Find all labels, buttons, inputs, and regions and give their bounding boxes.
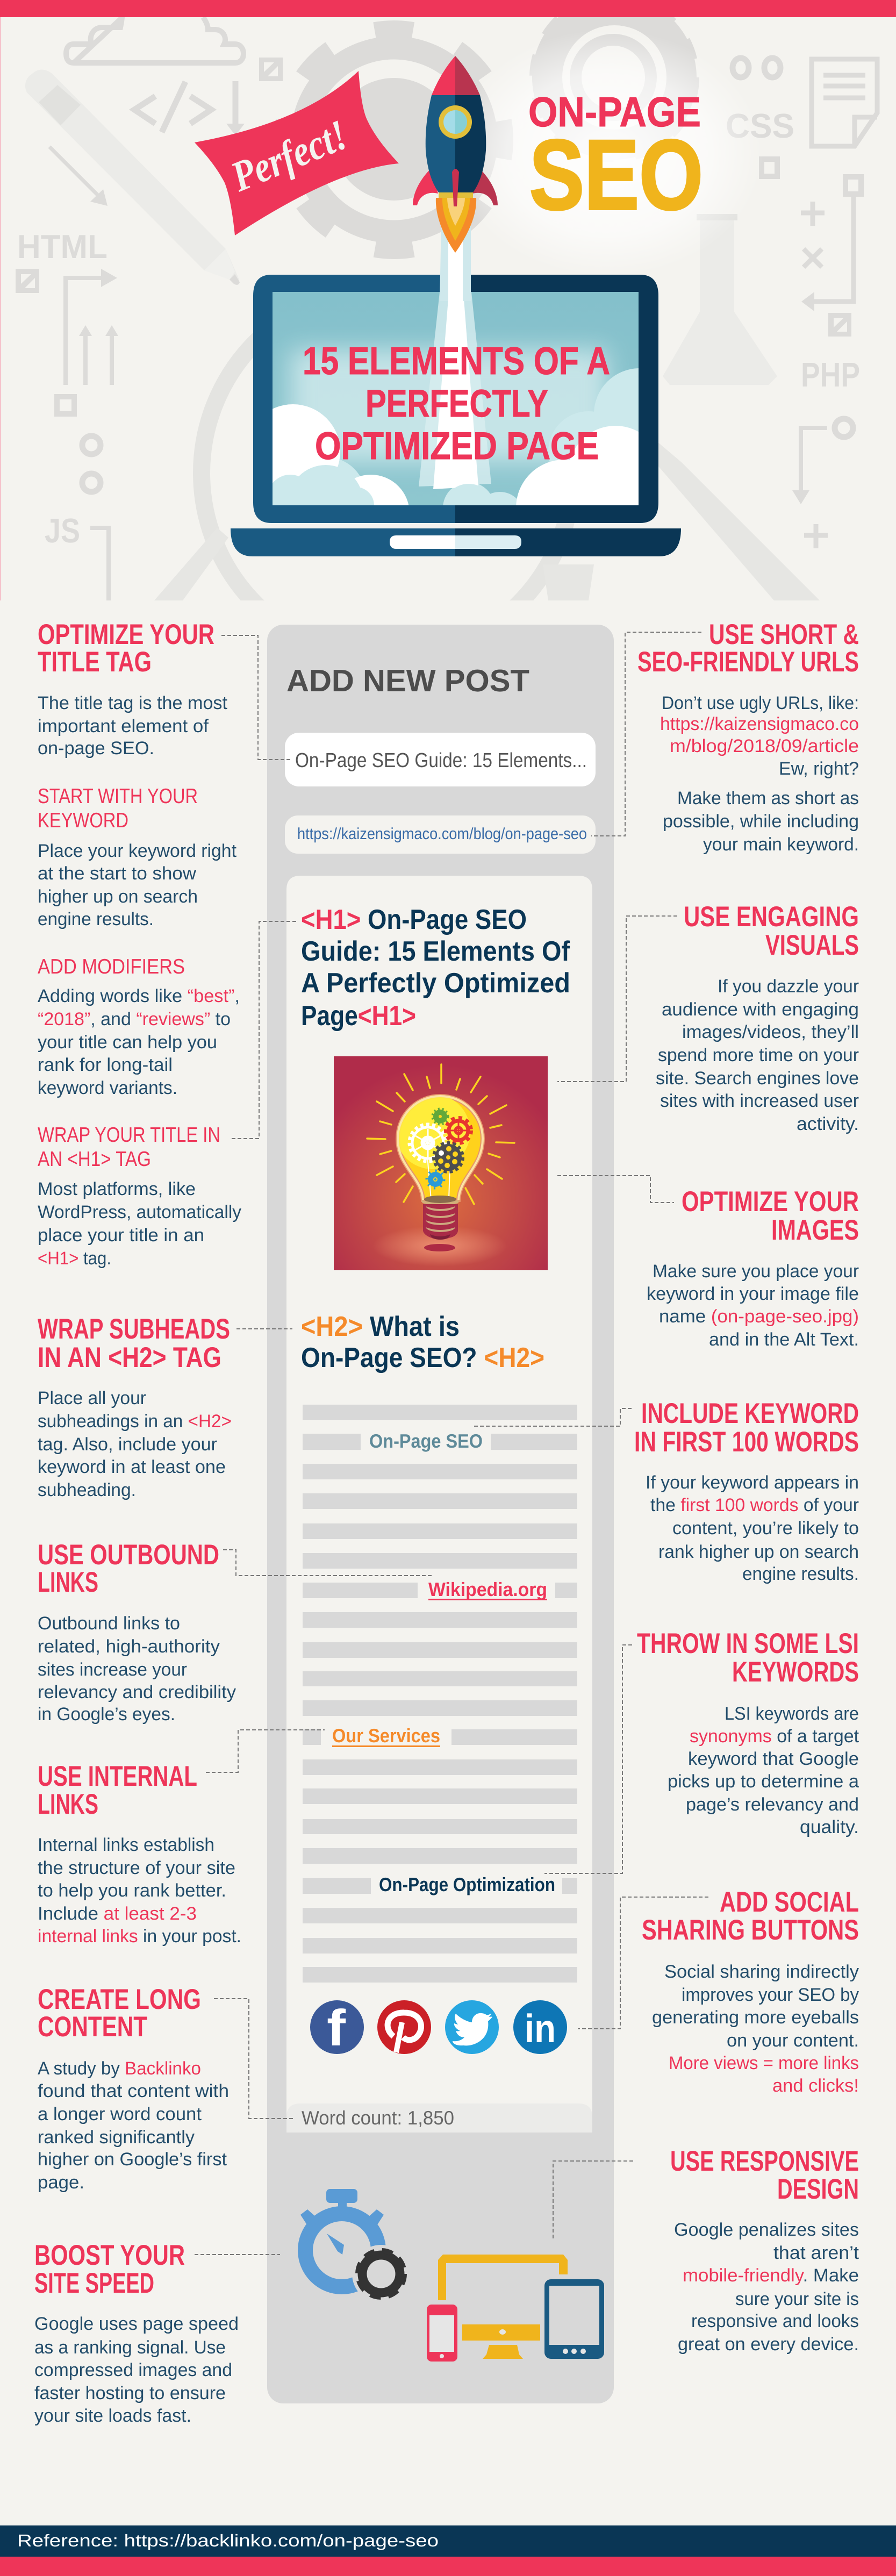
gear: green bbox=[432, 1108, 448, 1125]
text block: quality. bbox=[800, 1817, 859, 1837]
text block: possible, while including bbox=[663, 811, 859, 832]
text block bbox=[34, 2314, 239, 2426]
text block: keyword variants. bbox=[38, 1078, 177, 1098]
subheading: start with your keyword bbox=[38, 785, 198, 832]
text block bbox=[674, 2220, 859, 2355]
text block: related, high-authority bbox=[38, 1636, 220, 1657]
text block bbox=[38, 2058, 229, 2193]
text block: Ew, right? bbox=[779, 759, 859, 779]
h1 heading: Guide: 15 Elements Of bbox=[301, 936, 570, 967]
h1 heading: <H1> On-Page SEO bbox=[301, 904, 527, 935]
background icon pattern bbox=[0, 17, 879, 600]
text block: ranked significantly bbox=[38, 2127, 195, 2148]
text block: compressed images and bbox=[34, 2360, 232, 2380]
text block: keyword that Google bbox=[688, 1749, 859, 1769]
title input box: On-Page SEO Guide: 15 Elements... bbox=[295, 749, 587, 772]
subheading: wrap your title: AN <H1> TAG bbox=[38, 1148, 151, 1171]
text block bbox=[38, 986, 240, 1098]
text block: that aren’t bbox=[773, 2243, 859, 2263]
h1 heading: A Perfectly Optimized bbox=[301, 968, 570, 999]
text block: content, you’re likely to bbox=[672, 1518, 859, 1539]
text block: as a ranking signal. Use bbox=[34, 2337, 226, 2358]
banner: Perfect!: Perfect! bbox=[224, 111, 354, 201]
heading: OPTIMIZE YOUR bbox=[38, 619, 214, 650]
hero: laptop, rocket and titles bbox=[195, 56, 703, 556]
heading: WRAP SUBHEADS bbox=[38, 1313, 230, 1345]
text block: relevancy and credibility bbox=[38, 1682, 236, 1702]
text block bbox=[38, 1835, 241, 1947]
banner: Perfect! bbox=[195, 71, 399, 235]
icon: facebook bbox=[310, 2000, 364, 2057]
text block: Make them as short as bbox=[677, 788, 859, 808]
text block bbox=[38, 693, 228, 759]
text block: synonyms of a target bbox=[690, 1726, 859, 1747]
text block: mobile-friendly. Make bbox=[683, 2265, 859, 2286]
text block: improves your SEO by bbox=[682, 1985, 859, 2005]
text block: Place all your bbox=[38, 1388, 146, 1408]
text block: sites increase your bbox=[38, 1659, 187, 1680]
text block: https://kaizensigmaco.co bbox=[660, 714, 859, 734]
text block: <H1> tag. bbox=[38, 1248, 111, 1269]
gear: red bbox=[446, 1118, 471, 1143]
text block: keyword in your image file bbox=[647, 1284, 859, 1304]
heading: LINKS bbox=[38, 1566, 98, 1598]
text block: Social sharing indirectly bbox=[664, 1962, 859, 1982]
text block: The title tag is the most bbox=[38, 693, 228, 713]
heading: USE OUTBOUND bbox=[38, 1539, 219, 1571]
heading bbox=[684, 901, 859, 961]
text block: your main keyword. bbox=[703, 834, 859, 855]
title: On-Page SEO: ON-PAGE bbox=[528, 88, 701, 135]
panel: optimize your title tag bbox=[38, 619, 241, 1269]
text block: rank higher up on search bbox=[658, 1542, 859, 1562]
heading bbox=[38, 1539, 219, 1598]
heading: CONTENT bbox=[38, 2011, 147, 2043]
panel: engaging visuals bbox=[656, 901, 859, 1134]
internal link: our services: Our Services bbox=[332, 1725, 440, 1747]
heading: 15 elements: OPTIMIZED PAGE bbox=[315, 425, 599, 468]
panel: responsive design bbox=[670, 2145, 859, 2355]
word count bar: Word count: 1,850 bbox=[302, 2107, 454, 2129]
gear: white bbox=[410, 1125, 446, 1161]
heading: ADD SOCIAL bbox=[720, 1886, 859, 1918]
lsi keyword: on-page optimization: On-Page Optimization bbox=[379, 1873, 555, 1895]
text block: great on every device. bbox=[678, 2334, 859, 2355]
text block: If your keyword appears in bbox=[646, 1472, 859, 1493]
heading bbox=[38, 1313, 230, 1373]
text block: picks up to determine a bbox=[668, 1771, 859, 1792]
text block: audience with engaging bbox=[662, 999, 859, 1020]
heading bbox=[682, 1186, 859, 1246]
heading: SITE SPEED bbox=[34, 2267, 154, 2299]
text block: generating more eyeballs bbox=[652, 2007, 859, 2028]
title glow bbox=[451, 30, 763, 277]
panel: wrap subheads bbox=[38, 1313, 232, 1500]
h1 heading: Page<H1> bbox=[301, 1000, 416, 1032]
icon: twitter bbox=[445, 2000, 499, 2054]
text block: m/blog/2018/09/article bbox=[670, 736, 859, 756]
text block bbox=[668, 1704, 859, 1837]
text block: keyword in at least one bbox=[38, 1457, 226, 1477]
panel: use internal links bbox=[38, 1761, 241, 1947]
text block: the first 100 words of your bbox=[650, 1495, 859, 1515]
url input box bbox=[285, 815, 596, 854]
panel: blog post mockup bbox=[267, 625, 614, 2403]
top bar bbox=[0, 0, 896, 17]
subheading: add modifiers: ADD MODIFIERS bbox=[38, 955, 185, 978]
keyword: on-page seo: On-Page SEO bbox=[369, 1430, 483, 1452]
text block: important element of bbox=[38, 716, 209, 736]
body text placeholder lines bbox=[303, 1405, 577, 1983]
text block: subheadings in an <H2> bbox=[38, 1411, 232, 1432]
h2 heading bbox=[301, 1311, 544, 1373]
heading: 15 elements: 15 ELEMENTS OF A bbox=[303, 340, 610, 383]
text block: the structure of your site bbox=[38, 1858, 235, 1878]
image: light bulb with gears bbox=[334, 1056, 548, 1270]
heading: CREATE LONG bbox=[38, 1984, 201, 2015]
text block: your site loads fast. bbox=[34, 2406, 191, 2426]
text block: sure your site is bbox=[735, 2289, 859, 2309]
title: On-Page SEO: SEO bbox=[529, 120, 703, 231]
title: On-Page SEO bbox=[528, 88, 703, 231]
text block bbox=[38, 1613, 236, 1725]
heading: LINKS bbox=[38, 1788, 98, 1820]
icon: linkedin bbox=[513, 2000, 567, 2054]
text block: higher up on search bbox=[38, 886, 198, 907]
icon: pinterest bbox=[377, 2000, 431, 2054]
heading bbox=[38, 1761, 197, 1820]
text block: Outbound links to bbox=[38, 1613, 180, 1634]
text block: engine results. bbox=[742, 1564, 859, 1584]
heading: TITLE TAG bbox=[38, 646, 152, 678]
text block: page. bbox=[38, 2172, 84, 2193]
text block bbox=[652, 1962, 859, 2096]
text block: WordPress, automatically bbox=[38, 1202, 241, 1222]
text block: in Google’s eyes. bbox=[38, 1704, 175, 1725]
panel: create long content bbox=[38, 1984, 229, 2193]
heading: VISUALS bbox=[765, 929, 859, 961]
text block: Make sure you place your bbox=[653, 1261, 859, 1282]
subheading: wrap your title bbox=[38, 1124, 220, 1171]
heading: DESIGN bbox=[777, 2173, 859, 2205]
text block: your title can help you bbox=[38, 1032, 217, 1053]
heading: USE INTERNAL bbox=[38, 1761, 197, 1792]
text block: tag. Also, include your bbox=[38, 1434, 217, 1455]
icon: stopwatch and gear bbox=[300, 2189, 410, 2303]
panel: short urls bbox=[637, 619, 859, 855]
icon: responsive devices bbox=[427, 2255, 604, 2362]
icon: linkedin: in bbox=[525, 2006, 556, 2051]
text block: “2018”, and “reviews” to bbox=[38, 1009, 231, 1029]
heading: IN AN <H2> TAG bbox=[38, 1342, 221, 1373]
background icon pattern: PHP bbox=[801, 355, 860, 394]
subheading: start with your keyword: START WITH YOUR bbox=[38, 785, 198, 808]
text block: Google uses page speed bbox=[34, 2314, 239, 2334]
icon: rocket bbox=[413, 56, 498, 253]
text block: spend more time on your bbox=[658, 1045, 859, 1065]
background icon pattern: CSS bbox=[726, 106, 794, 145]
url input box: https://kaizensigmaco.com/blog/on-page-seo bbox=[297, 825, 587, 843]
text block: at the start to show bbox=[38, 863, 196, 884]
icon: laptop bbox=[231, 275, 685, 556]
text block: subheading. bbox=[38, 1480, 136, 1500]
text block: images/videos, they’ll bbox=[682, 1022, 859, 1042]
outbound link: wikipedia: Wikipedia.org bbox=[428, 1578, 547, 1600]
text block: A study by Backlinko bbox=[38, 2058, 201, 2079]
text block: faster hosting to ensure bbox=[34, 2383, 226, 2403]
subheading: wrap your title: WRAP YOUR TITLE IN bbox=[38, 1124, 220, 1147]
text block: Include at least 2-3 bbox=[38, 1904, 197, 1924]
text block: on-page SEO. bbox=[38, 738, 154, 759]
text block: on your content. bbox=[727, 2030, 859, 2051]
text block: LSI keywords are bbox=[725, 1704, 859, 1724]
heading bbox=[34, 2239, 185, 2299]
heading bbox=[637, 619, 859, 678]
heading: BOOST YOUR bbox=[34, 2239, 185, 2271]
text block bbox=[38, 1179, 241, 1269]
icon: facebook: f bbox=[327, 2000, 346, 2057]
panel: lsi keywords bbox=[637, 1628, 859, 1837]
heading: 15 elements bbox=[303, 340, 610, 468]
text block: higher on Google’s first bbox=[38, 2149, 227, 2170]
background icon pattern: HTML bbox=[17, 228, 107, 266]
heading bbox=[634, 1398, 859, 1458]
h1 heading bbox=[301, 904, 570, 1032]
text block bbox=[646, 1472, 859, 1584]
panel: boost your site speed bbox=[34, 2239, 239, 2426]
gear: blue bbox=[427, 1171, 444, 1188]
text block bbox=[656, 976, 859, 1134]
panel: include keyword bbox=[634, 1398, 859, 1584]
text block bbox=[38, 841, 237, 929]
text block: and in the Alt Text. bbox=[709, 1329, 859, 1350]
text block: Place your keyword right bbox=[38, 841, 237, 861]
heading: IMAGES bbox=[771, 1214, 859, 1246]
text block: Don’t use ugly URLs, like: bbox=[662, 693, 859, 713]
text block: found that content with bbox=[38, 2081, 229, 2101]
panel: social sharing bbox=[642, 1886, 859, 2096]
text block: Most platforms, like bbox=[38, 1179, 196, 1199]
text block bbox=[660, 693, 859, 855]
reference text: Reference: https://backlinko.com/on-page-seo bbox=[17, 2531, 439, 2550]
text block: If you dazzle your bbox=[718, 976, 859, 997]
text block: to help you rank better. bbox=[38, 1880, 226, 1901]
gear: dark bbox=[434, 1143, 463, 1172]
rocket exhaust bbox=[440, 223, 471, 303]
heading: add new post: ADD NEW POST bbox=[286, 663, 529, 698]
text block: engine results. bbox=[38, 909, 154, 929]
text block: Internal links establish bbox=[38, 1835, 214, 1855]
text block: Google penalizes sites bbox=[674, 2220, 859, 2240]
text block: site. Search engines love bbox=[656, 1068, 859, 1089]
panel: use outbound links bbox=[38, 1539, 236, 1725]
social sharing buttons bbox=[310, 2000, 567, 2057]
panel: optimize your images bbox=[647, 1186, 859, 1350]
footer bbox=[0, 2525, 896, 2576]
text block: name (on-page-seo.jpg) bbox=[659, 1306, 859, 1327]
title input box bbox=[285, 733, 596, 786]
heading: 15 elements: PERFECTLY bbox=[365, 382, 548, 425]
post content area bbox=[286, 876, 592, 2133]
text block: sites with increased user bbox=[660, 1091, 859, 1111]
text block: More views = more links bbox=[669, 2053, 859, 2073]
subheading: start with your keyword: KEYWORD bbox=[38, 809, 128, 832]
text block: and clicks! bbox=[772, 2076, 859, 2096]
heading bbox=[642, 1886, 859, 1946]
text block: internal links in your post. bbox=[38, 1926, 241, 1947]
heading bbox=[38, 1984, 201, 2043]
text block: rank for long-tail bbox=[38, 1055, 173, 1075]
h2 heading: <H2> What is bbox=[301, 1311, 460, 1342]
text block: responsive and looks bbox=[691, 2311, 859, 2331]
dashed connector lines bbox=[195, 632, 708, 2255]
background icon pattern: JS bbox=[45, 511, 80, 550]
heading: KEYWORDS bbox=[732, 1656, 859, 1688]
heading bbox=[637, 1628, 859, 1688]
text block: activity. bbox=[797, 1114, 859, 1134]
text block: place your title in an bbox=[38, 1225, 204, 1246]
text block bbox=[647, 1261, 859, 1350]
word count bar bbox=[286, 2103, 592, 2133]
text block: page’s relevancy and bbox=[686, 1794, 859, 1815]
h2 heading: On-Page SEO? <H2> bbox=[301, 1342, 544, 1373]
text block: Adding words like “best”, bbox=[38, 986, 240, 1006]
text block: a longer word count bbox=[38, 2104, 202, 2124]
heading bbox=[38, 619, 214, 678]
text block bbox=[38, 1388, 232, 1500]
heading bbox=[670, 2145, 859, 2205]
